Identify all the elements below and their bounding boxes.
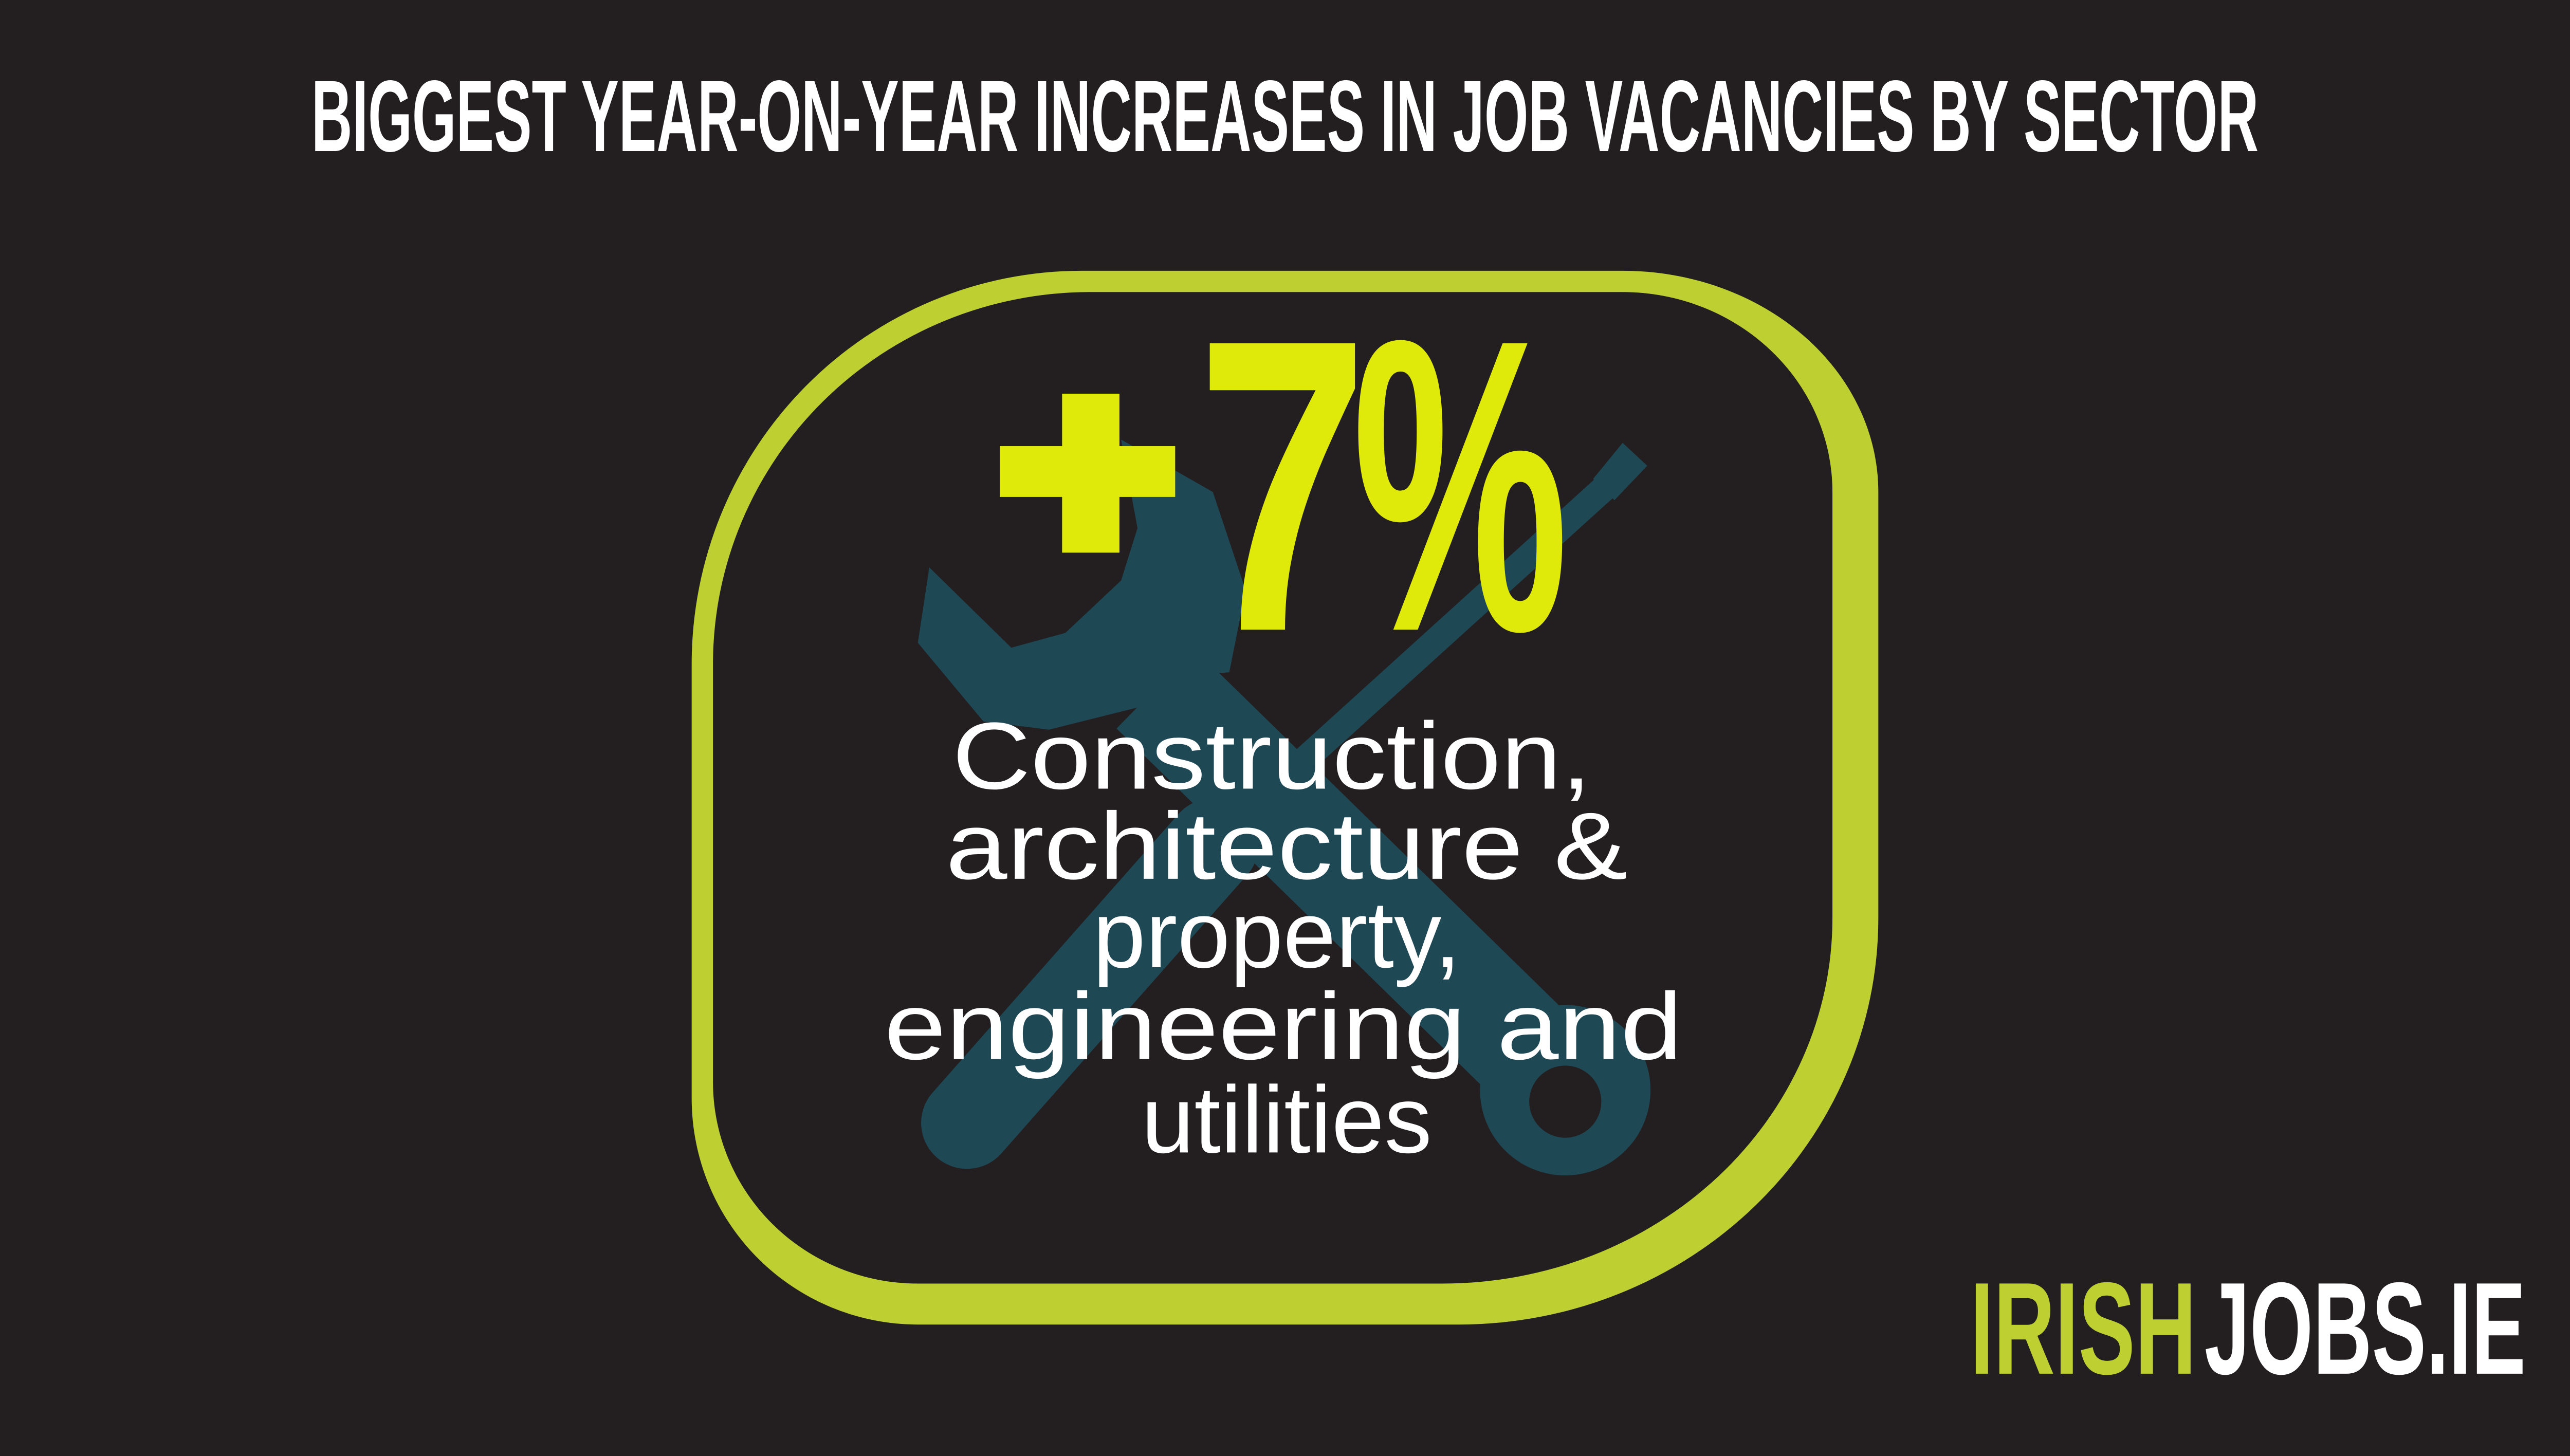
text block: sector description: utilities [1142,1067,1432,1173]
big percentage [1000,253,1569,718]
icon: wrench [918,439,1650,1175]
big percentage: 7 [1197,253,1369,718]
text block: sector description: Construction, [952,703,1591,809]
text block: sector description: architecture & [946,794,1627,899]
text block: sector description [884,703,1682,1173]
icon: screwdriver [967,443,1647,1123]
panel: rounded frame [692,271,1878,1324]
logo: IRISH [1970,1256,2196,1402]
text block: sector description: engineering and [884,974,1682,1080]
icon: wrench and screwdriver [918,439,1650,1175]
text block: sector description: property, [1093,882,1461,988]
big percentage: % [1352,253,1569,718]
logo [1970,1256,2526,1402]
